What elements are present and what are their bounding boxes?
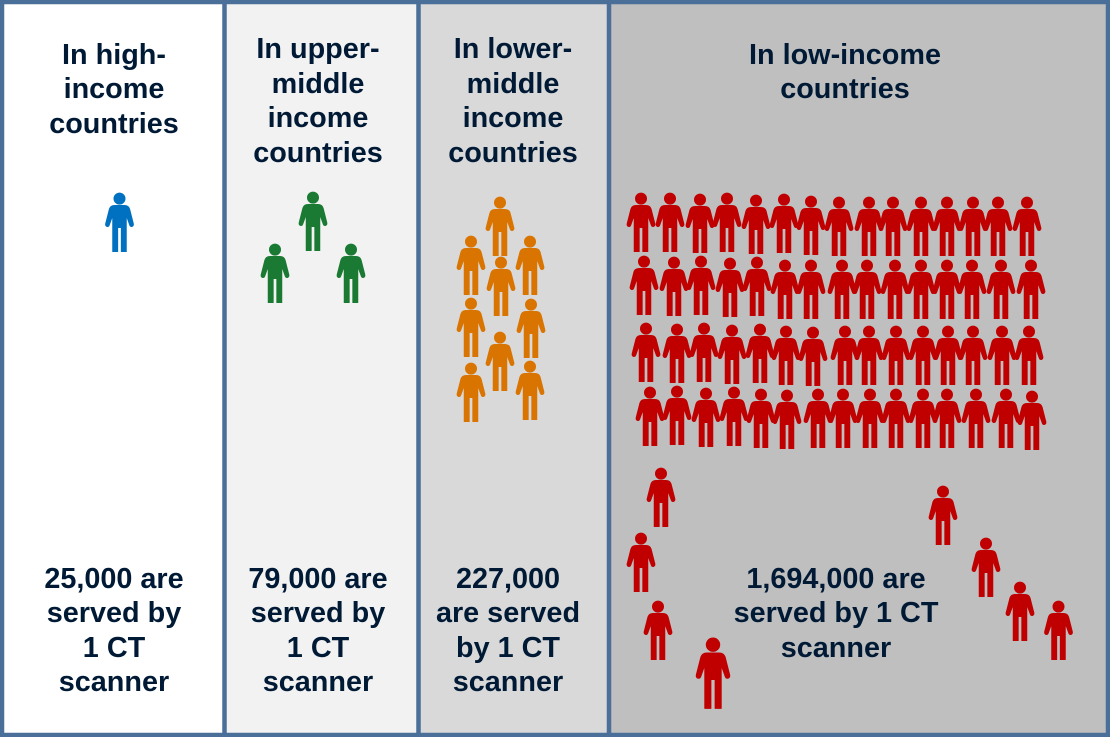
text: 25,000 served: scanner <box>59 666 169 698</box>
icon: blue person <box>106 193 133 252</box>
text: 25,000 served: served by <box>47 597 181 629</box>
heading: lower-middle income: middle <box>467 68 559 100</box>
heading: low-income: countries <box>780 73 910 105</box>
heading: low-income: In low-income <box>749 39 941 71</box>
text: 227,000 served: are served <box>436 597 580 629</box>
text: 79,000 served: 79,000 are <box>248 563 388 595</box>
icons: 9 orange people <box>457 197 545 422</box>
text: 227,000 served: by 1 CT <box>456 632 560 664</box>
heading: upper-middle income: countries <box>253 137 383 169</box>
icons: grid of red people <box>627 193 1046 450</box>
heading: lower-middle income: In lower- <box>454 33 572 65</box>
heading: high-income: income <box>64 73 164 105</box>
text: 1,694,000 served: scanner <box>781 632 891 664</box>
text: 79,000 served: scanner <box>263 666 373 698</box>
heading: lower-middle income: income <box>463 102 563 134</box>
text: 79,000 served: served by <box>251 597 385 629</box>
heading: upper-middle income: income <box>268 102 368 134</box>
heading: upper-middle income: middle <box>272 68 364 100</box>
panel: high-income countries <box>0 0 225 737</box>
heading: lower-middle income: countries <box>448 137 578 169</box>
text: 1,694,000 served: 1,694,000 are <box>746 563 926 595</box>
panel: lower-middle income countries <box>419 0 609 737</box>
text: 79,000 served: 1 CT <box>287 632 350 664</box>
panel: low-income countries <box>609 0 1110 737</box>
panel: upper-middle income countries <box>225 0 419 737</box>
text: 227,000 served: 227,000 <box>456 563 560 595</box>
text: 25,000 served: 25,000 are <box>44 563 184 595</box>
heading: upper-middle income: In upper- <box>256 33 380 65</box>
heading: high-income: countries <box>49 108 179 140</box>
icons: scattered red people around the text <box>627 468 1072 708</box>
heading: high-income: In high- <box>62 39 166 71</box>
icons: 3 green people <box>261 192 365 303</box>
text: 25,000 served: 1 CT <box>83 632 146 664</box>
text: 1,694,000 served: served by 1 CT <box>734 597 939 629</box>
text: 227,000 served: scanner <box>453 666 563 698</box>
